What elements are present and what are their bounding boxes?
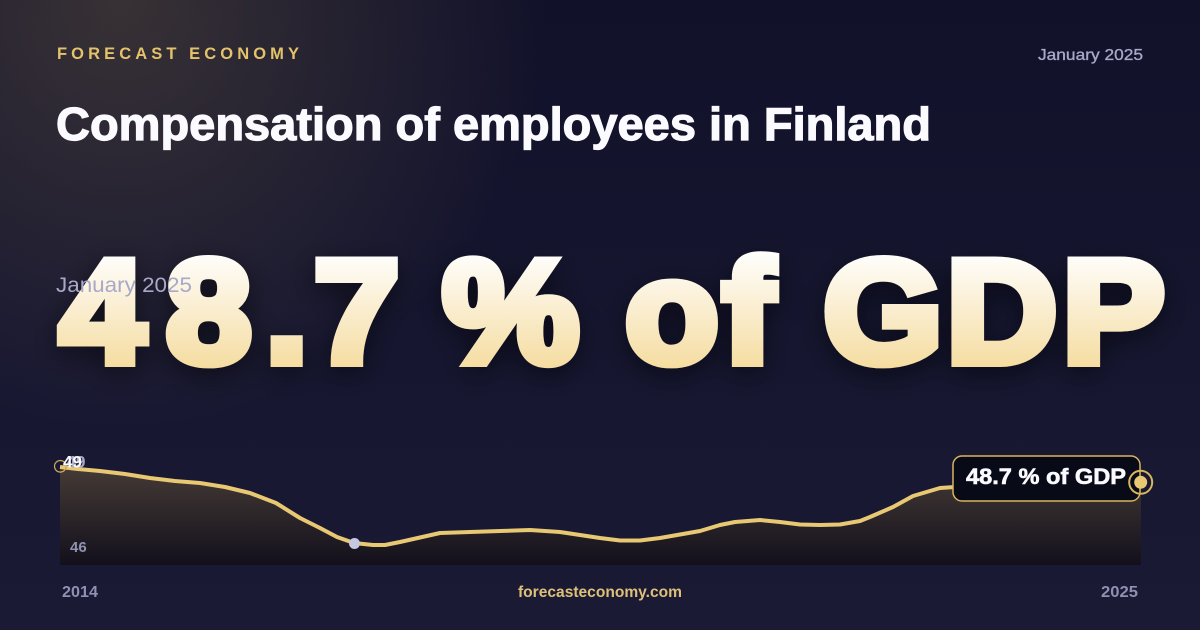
sparkline chart <box>54 452 1152 565</box>
end value callout <box>953 456 1140 501</box>
website: forecasteconomy.com <box>518 584 682 601</box>
title: Compensation of employees in Finland <box>56 98 931 150</box>
date overlay: January 2025 <box>56 274 192 297</box>
end marker <box>1129 471 1152 494</box>
start year: 2014 <box>62 584 98 601</box>
big value: 48.7 % of GDP <box>60 229 1165 393</box>
start marker <box>54 460 66 472</box>
brand label: FORECAST ECONOMY <box>57 45 299 63</box>
date top right: January 2025 <box>1038 47 1143 64</box>
trend line <box>60 467 955 545</box>
max label: 49 <box>63 452 82 472</box>
low point marker <box>349 538 360 549</box>
area under line <box>60 467 1141 565</box>
max label: 49 <box>66 452 85 472</box>
min label: 46 <box>70 539 87 556</box>
end year: 2025 <box>1101 584 1138 601</box>
end value callout: 48.7 % of GDP <box>966 464 1126 489</box>
